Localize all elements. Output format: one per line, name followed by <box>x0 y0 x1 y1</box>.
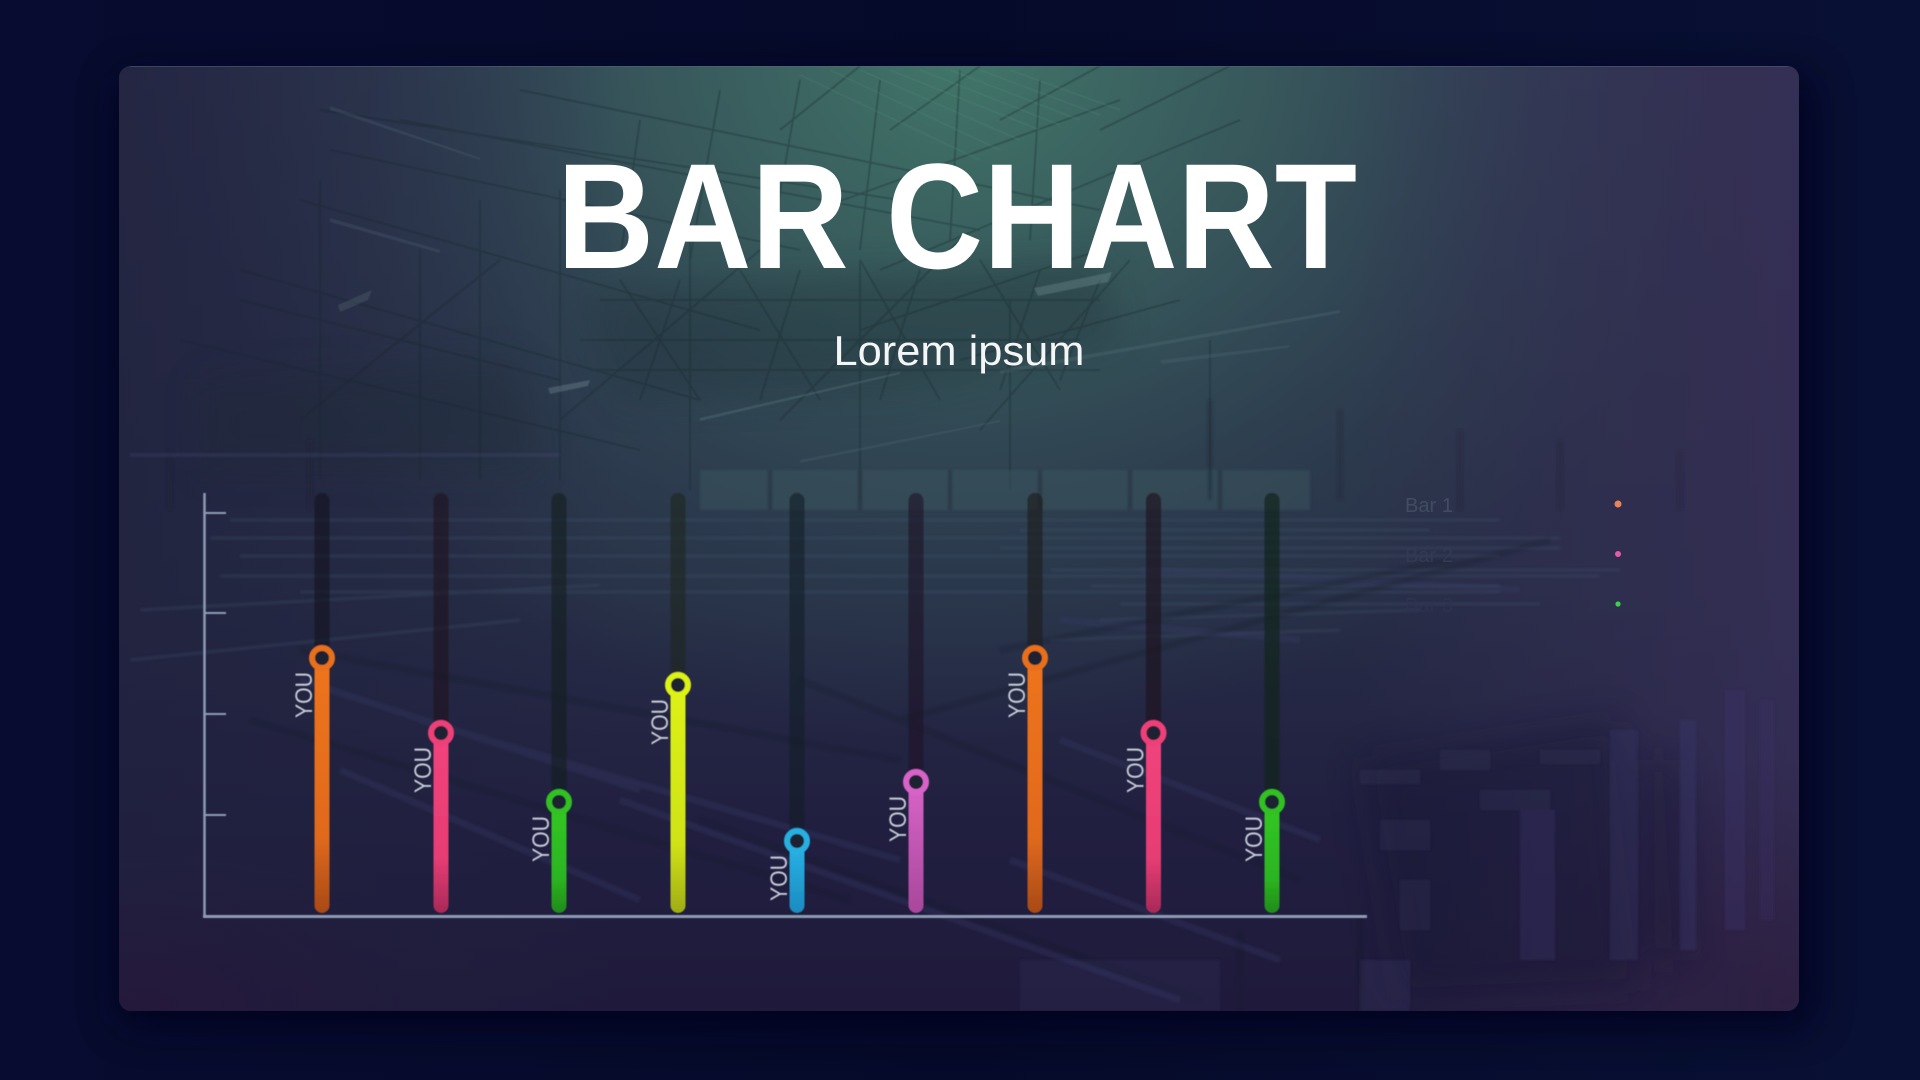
bar 9 green: YOU <box>1241 816 1268 862</box>
legend item: Bar 1 <box>1405 495 1622 517</box>
legend item: Bar 1: Bar 1 <box>1405 495 1453 517</box>
bar 6 violet: YOU <box>885 796 912 842</box>
legend item: Bar 2 <box>1405 545 1621 567</box>
bar 2 pink: YOU <box>410 747 437 793</box>
bar 9 green <box>1241 493 1282 913</box>
far wall band <box>130 400 1680 510</box>
roof trusses <box>180 66 1240 500</box>
dark truss mass <box>608 263 1109 384</box>
bar chart <box>203 493 1367 916</box>
bar 5 blue: YOU <box>766 855 793 901</box>
bar 6 violet <box>885 493 926 913</box>
bar 1 orange: YOU <box>291 672 318 718</box>
edge highlight <box>130 66 1788 67</box>
legend item: Bar 3: Bar 3 <box>1405 595 1453 617</box>
bar 4 yellow <box>647 493 688 913</box>
dark city-like block lower right <box>1393 729 1679 982</box>
axes <box>203 493 1367 916</box>
legend item: Bar 2: Bar 2 <box>1405 545 1453 567</box>
legend item: Bar 3 <box>1405 595 1621 617</box>
bar 7 orange: YOU <box>1004 672 1031 718</box>
title: BAR CHART <box>557 132 1357 300</box>
bar 5 blue <box>766 493 807 913</box>
bar 3 green <box>528 493 569 913</box>
bar 2 pink <box>410 493 451 913</box>
bar 7 orange <box>1004 493 1045 913</box>
bar 3 green: YOU <box>528 816 555 862</box>
panel: warehouse photo card <box>119 66 1799 1011</box>
bar 8 pink: YOU <box>1122 747 1150 793</box>
legend <box>1405 495 1622 617</box>
subtitle: Lorem ipsum <box>834 327 1084 374</box>
roof lights <box>330 106 1340 463</box>
panel shadow <box>118 76 1813 1026</box>
tower blocks lower right <box>1020 690 1774 1011</box>
warehouse floor rows <box>130 520 1620 660</box>
bar 8 pink <box>1122 493 1164 913</box>
bar 1 orange <box>291 493 332 913</box>
pale roof hatching <box>830 73 1118 156</box>
bar 4 yellow: YOU <box>647 699 674 745</box>
